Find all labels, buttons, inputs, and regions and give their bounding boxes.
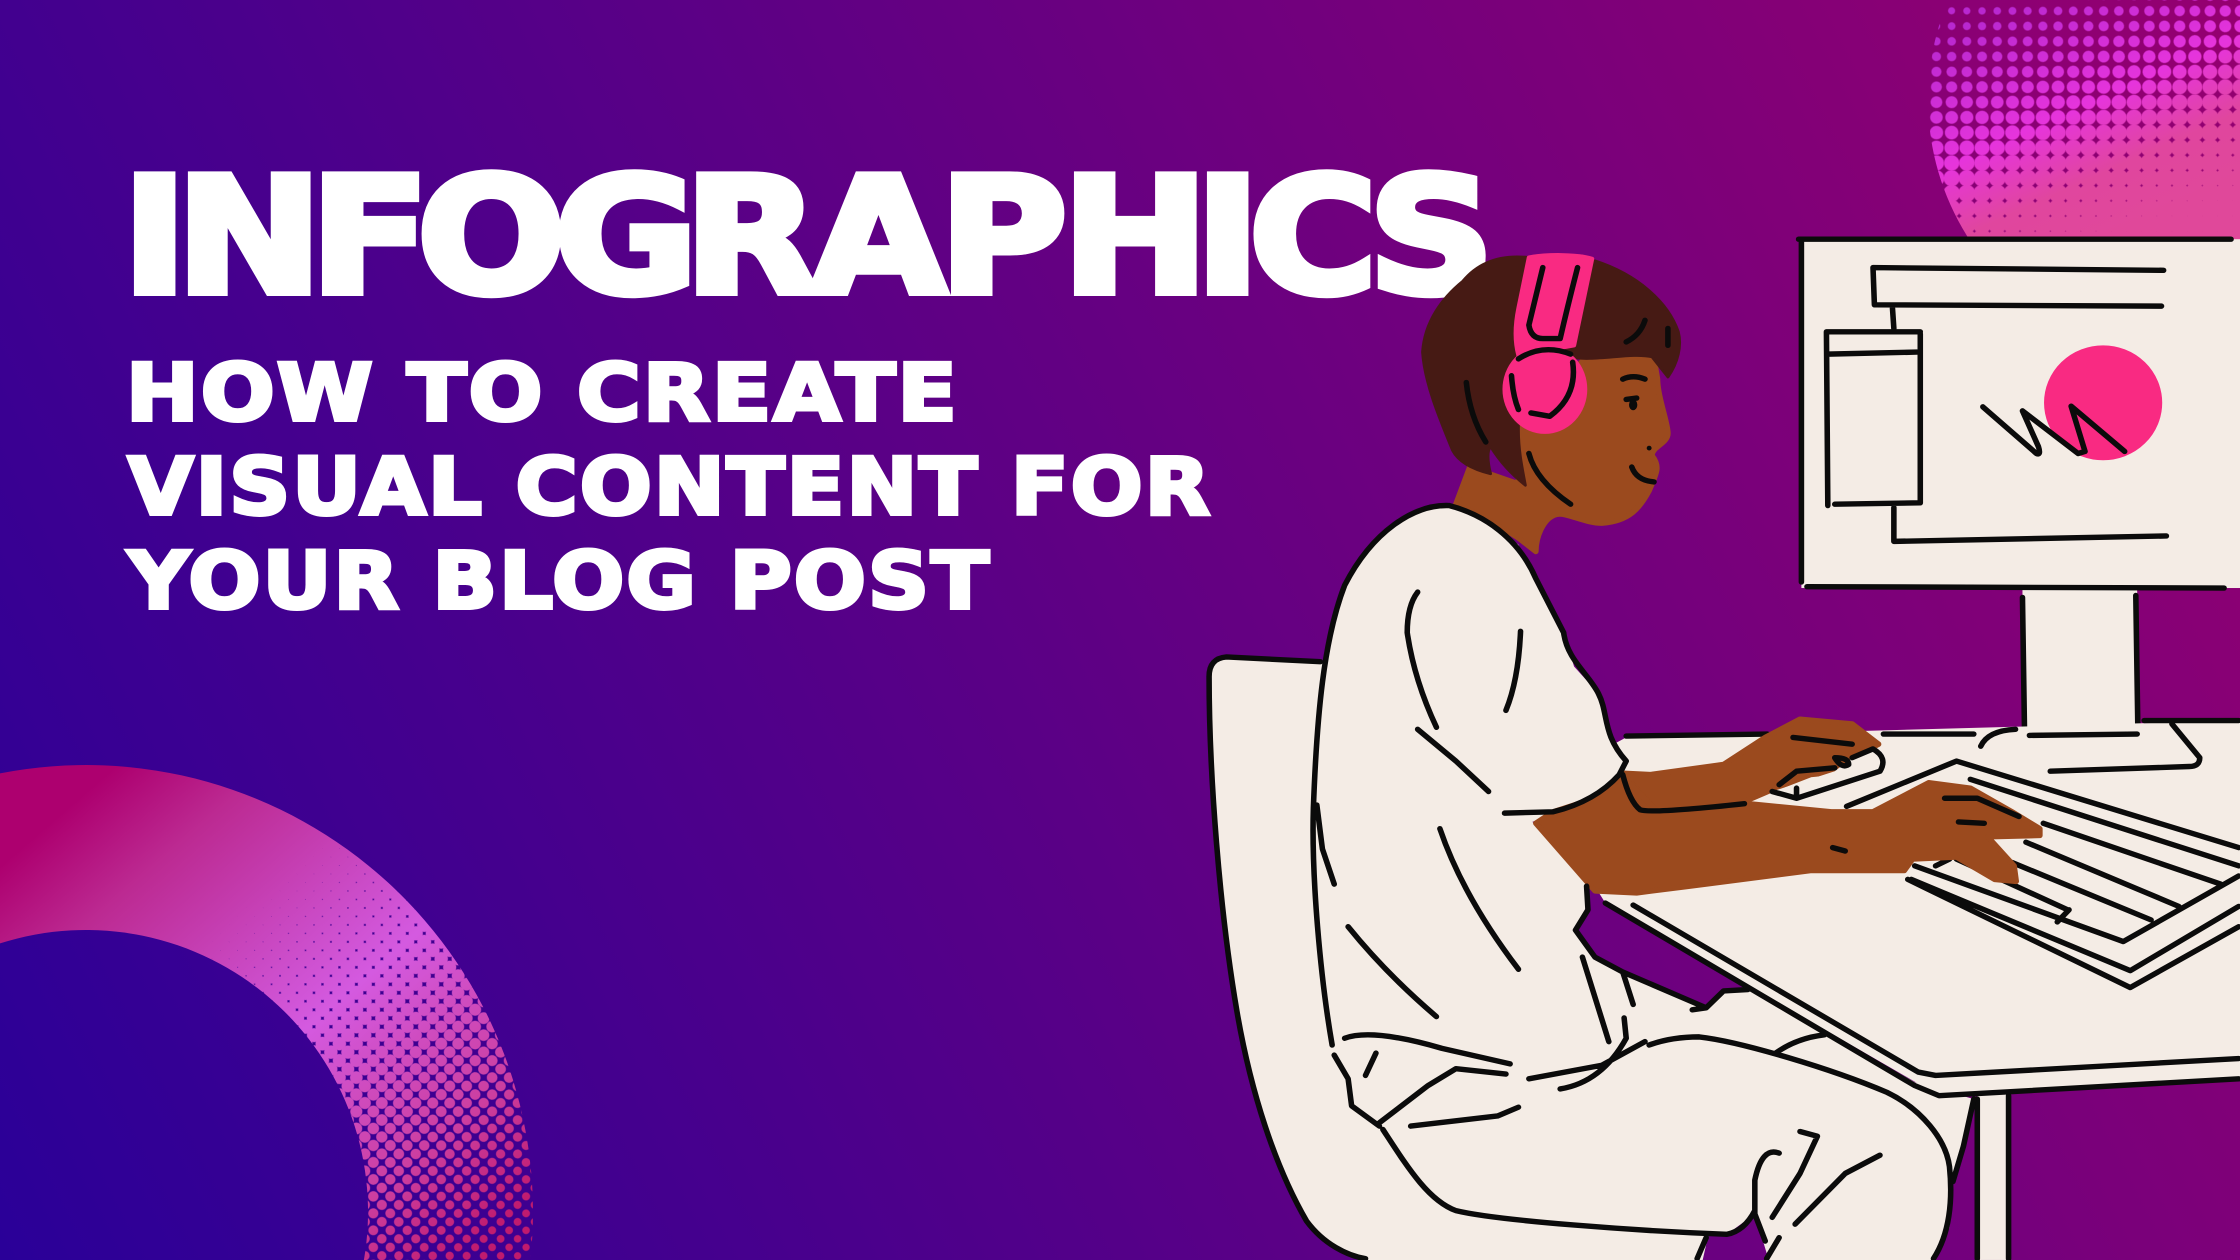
head and neck [1456, 359, 1668, 552]
title: INFOGRAPHICS [122, 145, 1494, 330]
arm and hand lines [1623, 737, 2019, 851]
person [1313, 255, 2040, 1260]
subtitle: HOW TO CREATE [126, 349, 959, 439]
monitor [1799, 239, 2240, 736]
subtitle [126, 349, 1212, 627]
decorative halftone ring [0, 765, 533, 1260]
desk front edge [1605, 903, 2239, 1096]
mouse [1772, 749, 1883, 798]
chair [1209, 657, 1713, 1260]
screen content [1826, 268, 2166, 541]
far arm and hand [1623, 719, 1879, 812]
decorative halftone circle [1930, 0, 2240, 240]
headphones [1505, 255, 1592, 432]
hair [1423, 257, 1680, 485]
subtitle: VISUAL CONTENT FOR [128, 443, 1212, 533]
face details [1466, 320, 1668, 504]
near arm and hand [1536, 776, 2040, 893]
keyboard [1847, 761, 2239, 988]
desk [1567, 721, 2240, 1260]
outline and clothing folds [1313, 506, 1974, 1259]
illustration: person working at a desk [1209, 239, 2240, 1260]
body: shirt and trousers [1313, 506, 1974, 1260]
subtitle: YOUR BLOG POST [127, 537, 991, 627]
